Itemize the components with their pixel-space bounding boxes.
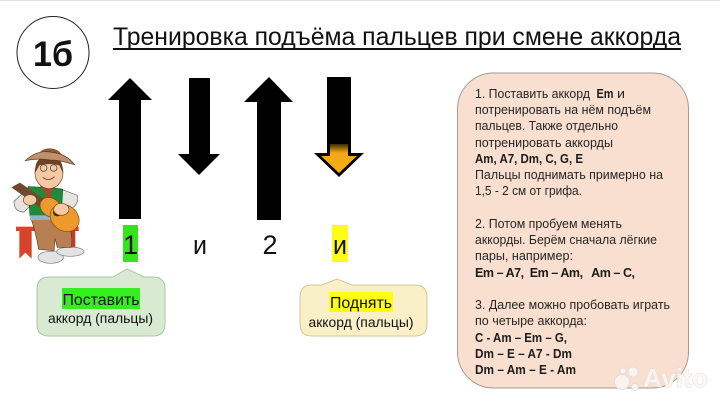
arrow down: first and <box>178 78 220 175</box>
step 1 text: пальцев. Также отдельно <box>475 119 618 133</box>
beat label: 2: 2 <box>262 230 278 260</box>
shoes <box>38 247 84 263</box>
step 3 text: по четыре аккорда: <box>475 314 587 328</box>
vest <box>28 187 63 218</box>
step 3 text <box>475 298 670 377</box>
step 2 text: Em – A7, Em – Am, Am – C, <box>475 266 635 280</box>
step 1 text: Пальцы поднимать примерно на <box>475 168 663 182</box>
step 1 text: потренировать аккорды <box>475 136 613 150</box>
guitar <box>11 183 84 237</box>
trousers <box>31 217 72 251</box>
watermark: Avito <box>614 363 708 393</box>
step 3 text: Dm – Am – E - Am <box>475 363 576 377</box>
arrow up: beat 1 <box>108 78 152 219</box>
panel: instructions <box>458 73 688 388</box>
shirt sleeves <box>14 187 78 212</box>
belt <box>30 215 55 220</box>
lesson number badge <box>17 16 89 88</box>
callout: put fingers <box>37 269 165 336</box>
face <box>35 157 63 189</box>
beat highlight: 1: 1 <box>123 230 138 260</box>
arrow down: second and, orange tip <box>314 77 364 177</box>
step 2 text: 2. Потом пробуем менять <box>475 217 622 231</box>
callout: put fingers: аккорд (пальцы) <box>48 310 153 326</box>
step 2 text: аккорды. Берём сначала лёгкие <box>475 233 657 247</box>
step 3 text: C - Am – Em – G, <box>475 331 567 345</box>
callout: lift fingers <box>300 279 427 336</box>
icon: guitarist cartoon <box>11 148 84 263</box>
title: Тренировка подъёма пальцев при смене аккорда <box>113 23 681 51</box>
step 1 text: Em <box>596 87 614 101</box>
watermark: Avito: Avito <box>643 363 708 393</box>
tie <box>40 186 55 202</box>
step 1 text: 1. Поставить аккорд <box>475 87 591 101</box>
callout: lift fingers: аккорд (пальцы) <box>308 314 414 330</box>
beat highlight: и: и <box>333 230 347 260</box>
step 1 text: потренировать на нём подъём <box>475 103 651 117</box>
beat label: и: и <box>193 230 207 260</box>
lesson number badge: 1б <box>33 35 73 74</box>
callout: put fingers: Поставить <box>62 292 140 309</box>
arrow up: beat 2 <box>244 77 293 220</box>
step 3 text: Dm – E – A7 - Dm <box>475 347 572 361</box>
hands <box>23 195 69 215</box>
glasses and smile <box>40 165 57 180</box>
step 1 text: 1,5 - 2 см от грифа. <box>475 184 582 198</box>
step 2 text <box>475 217 657 280</box>
step 1 text: и <box>617 87 625 101</box>
step 3 text: 3. Далее можно пробовать играть <box>475 298 670 312</box>
stool <box>16 227 79 259</box>
step 2 text: пары, например: <box>475 249 573 263</box>
callout: lift fingers: Поднять <box>330 295 392 312</box>
step 1 text <box>475 87 663 198</box>
hair <box>35 158 63 173</box>
hat <box>25 148 75 165</box>
step 1 text: Am, A7, Dm, C, G, E <box>475 152 583 166</box>
